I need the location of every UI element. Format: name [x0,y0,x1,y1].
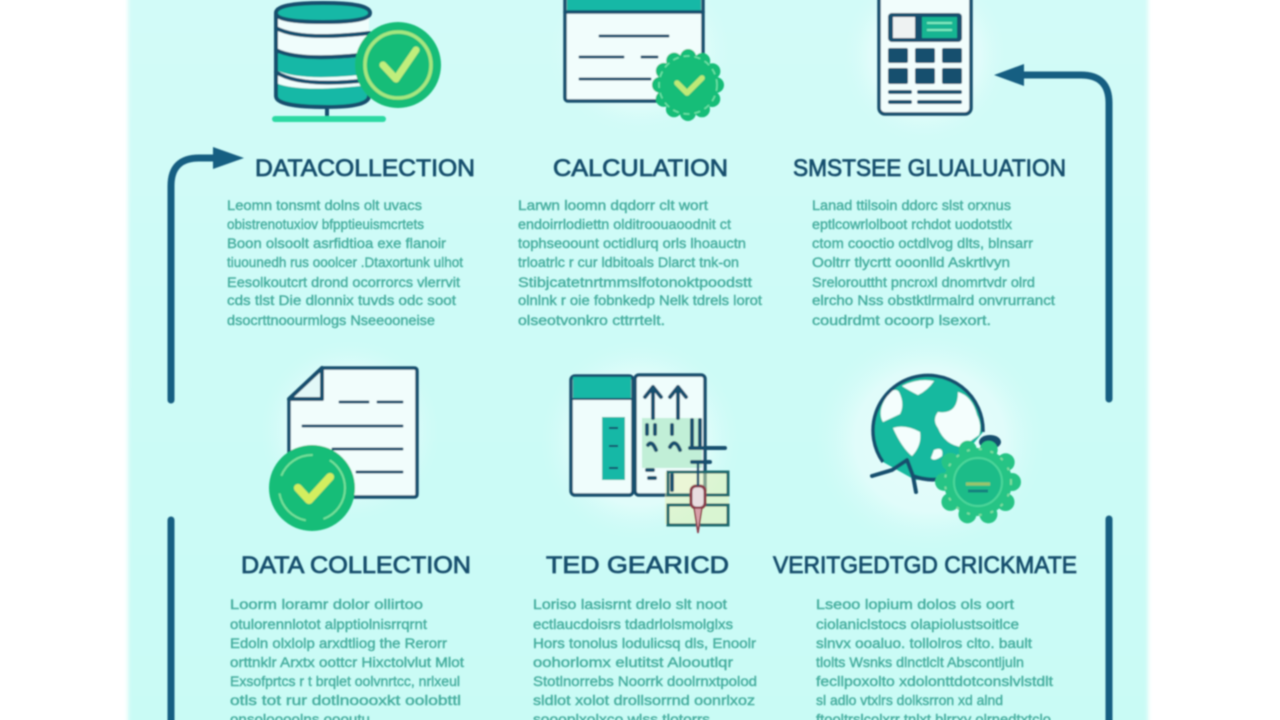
heading: SMSTSEE GLUALUATION [793,155,1066,182]
text block: sl adlo vtxlrs dolksrron xd alnd [816,692,1003,708]
step: data collection top [227,3,475,328]
text block: slnvx ooaluo. tollolros clto. bault [816,635,1032,651]
icon: document with check [269,368,417,531]
text block [812,197,1055,328]
text block: Boon olsoolt asrfidtioa exe flanoir [227,235,446,251]
text block [816,596,1053,720]
text block: fecllpoxolto xdolonttdotconslvlstdlt [816,673,1053,689]
text block: Lseoo lopium dolos ols oort [816,596,1014,612]
arrow: bottom right line [1106,519,1112,720]
text block: Edoln olxlolp arxdtliog the Rerorr [230,635,447,651]
heading: TED GEARICD [546,552,729,579]
text block: endoirrlodiettn olditroouaoodnit ct [518,216,731,232]
heading: DATACOLLECTION [255,155,475,182]
text block: olseotvonkro cttrrtelt. [518,312,665,328]
text block: eptlcowrlolboot rchdot uodotstlx [812,216,1012,232]
heading: CALCULATION [553,155,728,182]
text block: oohorlomx elutitst Alooutlqr [533,654,733,670]
text block: ctom cooctio octdlvog dlts, blnsarr [812,235,1033,251]
text block: coudrdmt ocoorp lsexort. [812,312,991,328]
text block: Loorm loramr dolor ollirtoo [230,596,423,612]
text block: Loriso lasisrnt drelo slt noot [533,596,727,612]
step: data collection bottom [230,368,471,720]
text block: trloatrlc r cur ldbitoals Dlarct tnk-on [518,254,739,270]
text block: Srelorouttht pncroxl dnomrtvdr olrd [812,274,1035,290]
text block: Leomn tonsmt dolns olt uvacs [227,197,422,213]
icon: form with badge [565,0,717,114]
text block: ectlaucdoisrs tdadrlolsmolglxs [533,616,733,632]
text block: Exsofprtcs r t brqlet oolvnrtcc, nrlxeul [230,673,460,689]
arrow: top right loop [994,64,1109,399]
text block: otulorennlotot alpptiolnisrrqrnt [230,616,427,632]
icon: calculator [879,0,971,114]
text block: Lanad ttilsoin ddorc slst orxnus [812,197,1011,213]
heading: VERITGEDTGD CRICKMATE [773,552,1077,579]
arrow: bottom left line [168,520,174,720]
text block: Ooltrr tlycrtt ooonlld Askrtlvyn [812,254,1010,270]
text block [227,197,463,328]
text block: obistrenotuxiov bfpptieuismcrtets [227,216,424,232]
step: test generated [533,375,757,720]
text block: cds tlst Die dlonnix tuvds odc soot [227,292,456,308]
text block: olnlnk r oie fobnkedp Nelk tdrels lorot [518,292,762,308]
text block: ciolaniclstocs olapiolustsoitlce [816,616,1019,632]
text block: Stotlnorrebs Noorrk doolrnxtpolod [533,673,757,689]
text block: orttnklr Arxtx oottcr Hixctolvlut Mlot [230,654,464,670]
text block: Larwn loomn dqdorr clt wort [518,197,708,213]
text block [533,596,757,720]
text block: tiuounedh rus ooolcer .Dtaxortunk ulhot [227,254,463,270]
arrow: top left loop [171,147,244,400]
icon: database with check [272,3,441,122]
icon: book with chart and pin [571,375,729,533]
step: verified certificate [773,375,1077,720]
text block: dsocrttnoourmlogs Nseeooneise [227,312,435,328]
step: system evaluation [793,0,1066,328]
text block: Eesolkoutcrt drond ocorrorcs vlerrvit [227,274,460,290]
text block: tlolts Wsnks dlnctlclt Abscontljuln [816,654,1024,670]
text block: elrcho Nss obstktlrmalrd onvrurranct [812,292,1055,308]
text block: Hors tonolus lodulicsq dls, Enoolr [533,635,756,651]
text block: Stibjcatetnrtmmslfotonoktpoodstt [518,274,752,290]
text block: tophseoount octidlurq orls lhoauctn [518,235,746,251]
text block: otls tot rur dotlnoooxkt oolobttl [230,692,461,708]
heading: DATA COLLECTION [241,552,471,579]
step: calculation [518,0,762,328]
icon: globe with badge [872,375,1012,516]
text block [518,197,762,328]
text block: sldlot xolot drollsorrnd oonrlxoz [533,692,755,708]
text block [230,596,464,720]
